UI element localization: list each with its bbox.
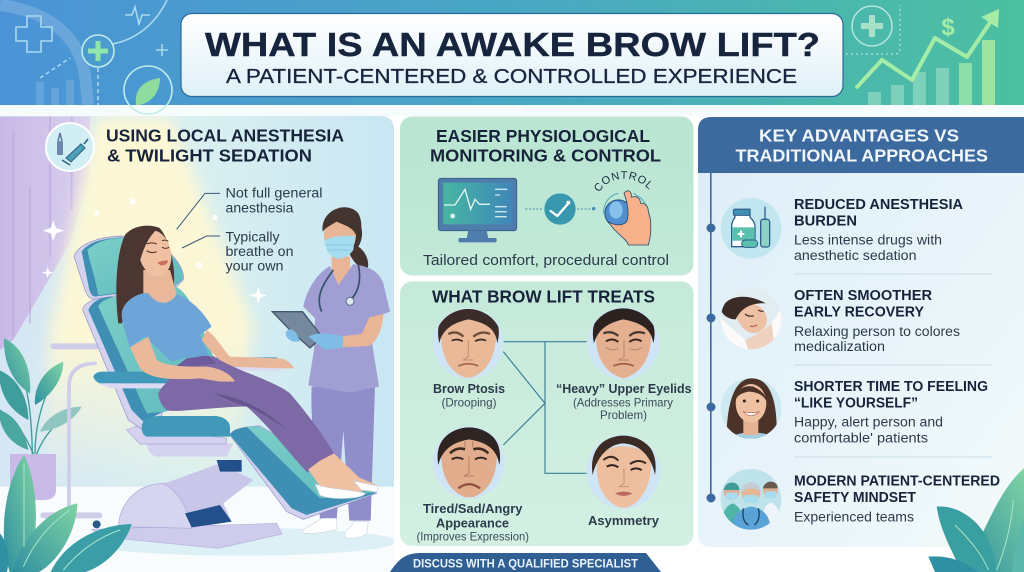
header banner [0, 0, 1024, 116]
icon: medicine bottle and syringe [721, 198, 781, 259]
heading: monitoring and control: MONITORING & CONTROL [430, 146, 661, 166]
text: reduced anesthesia burden: BURDEN [794, 214, 857, 230]
text: smoother early recovery: Relaxing person to colores [794, 324, 960, 339]
text: smoother early recovery: EARLY RECOVERY [794, 304, 924, 320]
text: feeling like yourself: SHORTER TIME TO FEELING [794, 379, 988, 395]
icon: monitor, check and control knob [438, 171, 652, 246]
reclining chair [74, 236, 377, 548]
icon: monitor, check and control knob: CONTROL [594, 171, 651, 191]
header decoration: growth chart [846, 5, 999, 105]
callout: typically breathe on your own: breathe on [226, 244, 294, 259]
callout: typically breathe on your own [226, 230, 294, 274]
text: feeling like yourself [794, 379, 988, 446]
title: WHAT IS AN AWAKE BROW LIFT? [205, 26, 820, 63]
header decoration: growth chart: $ [941, 14, 955, 41]
callout: typically breathe on your own: your own [226, 258, 284, 274]
text: feeling like yourself: Happy, alert person and [794, 414, 943, 430]
icon: vial and syringe [46, 123, 94, 171]
text: reduced anesthesia burden: Less intense drugs with [794, 232, 942, 248]
decorative plant: bottom right [928, 468, 1024, 572]
header: key advantages [698, 117, 1024, 173]
text: patient-centered safety [794, 474, 1000, 524]
text: patient-centered safety: MODERN PATIENT-CENTERED [794, 474, 1000, 490]
footer tab: discuss with a qualified specialist [390, 553, 661, 572]
label: tired sad angry appearance: Tired/Sad/Angry [423, 501, 523, 516]
heading: monitoring and control: EASIER PHYSIOLOGICAL [436, 126, 650, 146]
callout: not full general anesthesia [226, 188, 322, 212]
item: reduced anesthesia burden [721, 197, 964, 263]
connector lines [503, 342, 587, 473]
heading: local anesthesia: USING LOCAL ANESTHESIA [106, 126, 344, 146]
label: brow ptosis [433, 381, 505, 410]
icon: smiling woman [721, 378, 781, 443]
label: brow ptosis: Brow Ptosis [433, 381, 505, 396]
callout: not full general anesthesia: Not full general [226, 186, 322, 200]
subtitle: A PATIENT-CENTERED & CONTROLLED EXPERIENCE [226, 66, 797, 88]
panel: what brow lift treats [400, 282, 694, 546]
callout leader lines [177, 193, 220, 248]
text: feeling like yourself: “LIKE YOURSELF” [794, 396, 918, 412]
title box [181, 14, 843, 96]
label: heavy upper eyelids: Problem) [600, 408, 647, 422]
illustration: treatment room with patient and nurse [0, 117, 397, 572]
text: feeling like yourself: comfortable' patients [794, 430, 928, 446]
panel: local anesthesia and twilight sedation [0, 116, 397, 572]
timeline [706, 173, 716, 502]
icon: sleeping woman [720, 288, 782, 350]
label: heavy upper eyelids: (Addresses Primary [573, 396, 673, 410]
label: heavy upper eyelids [556, 381, 692, 422]
panel: key advantages [698, 117, 1024, 547]
heading: monitoring and control [430, 126, 661, 166]
item: smoother early recovery [718, 287, 960, 354]
callout: typically breathe on your own: Typically [226, 230, 280, 244]
caption: tailored comfort: Tailored comfort, procedural control [423, 252, 669, 269]
heading: local anesthesia: & TWILIGHT SEDATION [107, 146, 312, 166]
header: key advantages: TRADITIONAL APPROACHES [736, 146, 988, 166]
label: tired sad angry appearance: (Improves Expression) [416, 530, 529, 544]
face: tired sad angry [433, 426, 505, 498]
text: smoother early recovery: medicalization [794, 339, 885, 354]
face: asymmetry [586, 435, 660, 509]
foreground leaves [0, 455, 132, 572]
text: smoother early recovery: OFTEN SMOOTHER [794, 288, 933, 304]
item: patient-centered safety [721, 469, 1000, 531]
label: tired sad angry appearance [416, 501, 529, 544]
heading: what brow lift treats: WHAT BROW LIFT TREATS [432, 286, 655, 306]
text: patient-centered safety: SAFETY MINDSET [794, 490, 916, 506]
IV stand [43, 346, 101, 528]
text: reduced anesthesia burden [794, 197, 964, 263]
callout: not full general anesthesia: anesthesia [226, 200, 294, 216]
item: feeling like yourself [721, 378, 988, 446]
footer tab: discuss with a qualified specialist: DISCUSS WITH A QUALIFIED SPECIALIST [413, 558, 638, 570]
label: heavy upper eyelids: “Heavy” Upper Eyelids [556, 381, 692, 396]
header: key advantages: KEY ADVANTAGES VS [759, 126, 959, 146]
panel: physiological monitoring [400, 116, 694, 276]
icon: medical team [721, 469, 782, 531]
nurse [272, 207, 390, 538]
face: brow ptosis [433, 307, 504, 379]
header decoration: medical icons [0, 0, 172, 114]
text: reduced anesthesia burden: anesthetic sedation [794, 248, 916, 263]
label: asymmetry: Asymmetry [588, 513, 660, 528]
text: patient-centered safety: Experienced teams [794, 510, 914, 524]
label: brow ptosis: (Drooping) [442, 396, 496, 410]
text: smoother early recovery [794, 288, 960, 354]
sparkles [42, 199, 267, 304]
label: tired sad angry appearance: Appearance [436, 516, 509, 530]
plant in pot [0, 338, 82, 500]
patient [116, 226, 378, 498]
text: reduced anesthesia burden: REDUCED ANESTHESIA [794, 197, 964, 213]
face: heavy upper eyelids [587, 307, 659, 379]
heading: local anesthesia [107, 130, 344, 162]
